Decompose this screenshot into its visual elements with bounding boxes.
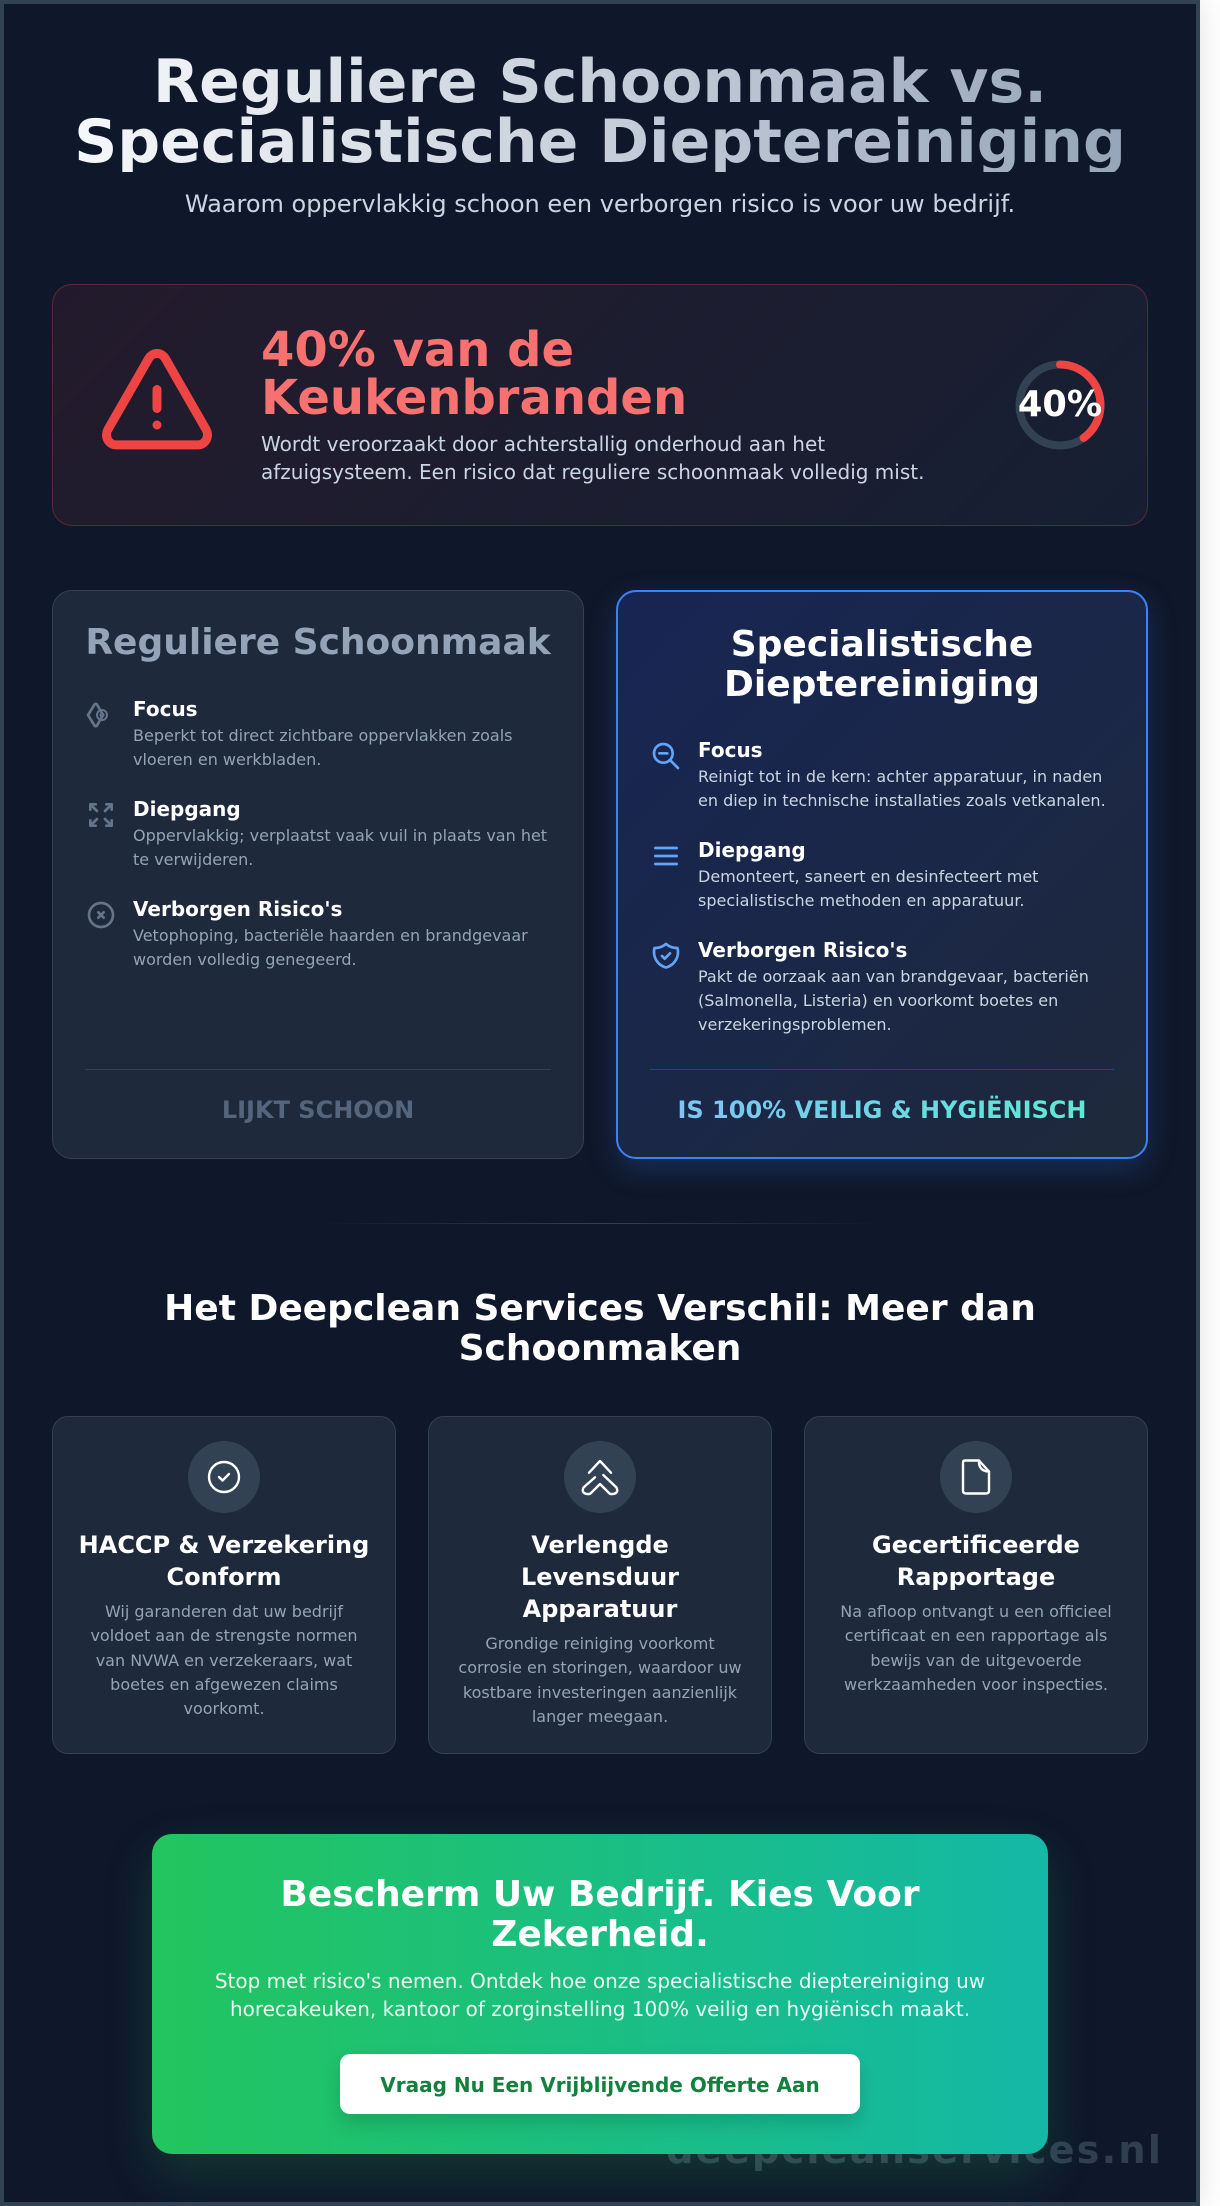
cta text [215, 1969, 985, 2021]
card text [458, 1634, 742, 1726]
alert text: Wordt veroorzaakt door achterstallig onderhoud aan het [261, 432, 825, 456]
panel: alert statistic [52, 284, 1148, 526]
card title: Conform [167, 1563, 281, 1591]
cta text: horecakeuken, kantoor of zorginstelling 100% veilig en hygiënisch maakt. [230, 1997, 970, 2021]
card text [840, 1602, 1112, 1694]
watermark: deepcleanservices.nl [666, 2128, 1163, 2173]
depth text [133, 797, 547, 869]
icon: layers lines [654, 846, 678, 866]
depth label: Diepgang [698, 838, 806, 862]
panel: HACCP [52, 1416, 396, 1754]
depth text [698, 838, 1038, 910]
alert text [261, 432, 924, 484]
card title: Levensduur [521, 1563, 679, 1591]
risks label: Verborgen Risico's [698, 938, 907, 962]
verdict: looks clean: LIJKT SCHOON [222, 1096, 414, 1124]
focus description: Reinigt tot in de kern: achter apparatuur, in naden [698, 766, 1102, 786]
heading: specialist cleaning: Dieptereiniging [724, 664, 1040, 705]
icon: warning triangle [102, 349, 212, 450]
focus text [133, 697, 512, 769]
focus label: Focus [133, 697, 198, 721]
depth description: Demonteert, saneert en desinfecteert met [698, 866, 1038, 886]
item: depth [89, 797, 547, 869]
section heading: difference: Het Deepclean Services Verschil: Meer dan [164, 1288, 1036, 1329]
cta button [340, 2054, 860, 2114]
risks description: verzekeringsproblemen. [698, 1015, 892, 1034]
card title: HACCP & Verzekering [79, 1530, 369, 1558]
risks description [698, 966, 1089, 1034]
item: focus [86, 697, 512, 769]
ring value: 40% [1018, 384, 1102, 425]
card text [90, 1602, 358, 1718]
card text: kostbare investeringen aanzienlijk [463, 1683, 737, 1702]
alert heading: 40% van de [261, 322, 574, 378]
cta heading: Bescherm Uw Bedrijf. Kies Voor [280, 1874, 920, 1915]
card title: Apparatuur [523, 1595, 677, 1623]
card text: voorkomt. [183, 1699, 265, 1718]
heading: specialist cleaning [724, 624, 1040, 705]
risks description: Pakt de oorzaak aan van brandgevaar, bacteriën [698, 966, 1089, 986]
depth description: specialistische methoden en apparatuur. [698, 891, 1025, 910]
alert heading [261, 322, 687, 426]
card text: langer meegaan. [532, 1707, 668, 1726]
verdict: safe and hygienic: IS 100% VEILIG & HYGIËNISCH [677, 1096, 1087, 1124]
depth description [133, 826, 547, 869]
card title [872, 1530, 1080, 1591]
section heading: difference [164, 1288, 1036, 1369]
icon: check circle [188, 1441, 260, 1513]
focus description: vloeren en werkbladen. [133, 750, 321, 769]
focus description [133, 726, 512, 769]
subtitle: Waarom oppervlakkig schoon een verborgen risico is voor uw bedrijf. [185, 190, 1015, 218]
item: focus [652, 738, 1106, 810]
cta button: Vraag Nu Een Vrijblijvende Offerte Aan [380, 2073, 820, 2097]
risks label: Verborgen Risico's [133, 897, 342, 921]
alert heading: Keukenbranden [261, 370, 687, 426]
risks description: (Salmonella, Listeria) en voorkomt boetes en [698, 991, 1058, 1010]
risks text [698, 938, 1089, 1034]
focus description: Beperkt tot direct zichtbare oppervlakken zoals [133, 726, 512, 744]
card title: Verlengde [531, 1530, 669, 1558]
cta text: Stop met risico's nemen. Ontdek hoe onze specialistische dieptereiniging uw [215, 1969, 985, 1993]
focus label: Focus [698, 738, 763, 762]
card text: bewijs van de uitgevoerde [870, 1651, 1082, 1670]
focus description: en diep in technische installaties zoals vetkanalen. [698, 791, 1106, 810]
title: Specialistische Dieptereiniging [74, 107, 1126, 177]
card text: certificaat en een rapportage als [845, 1626, 1107, 1645]
panel: reporting [804, 1416, 1148, 1754]
card text: voldoet aan de strengste normen [90, 1626, 358, 1645]
alert text: afzuigsysteem. Een risico dat reguliere schoonmaak volledig mist. [261, 460, 924, 484]
card title [521, 1530, 679, 1623]
panel: regular cleaning [52, 590, 584, 1159]
title: Reguliere Schoonmaak vs. [153, 47, 1047, 117]
panel: specialist deep cleaning [616, 590, 1148, 1159]
risks description: Vetophoping, bacteriële haarden en brandgevaar [133, 926, 528, 944]
depth description [698, 866, 1038, 910]
item: hidden risks [88, 897, 528, 969]
panel: lifespan [428, 1416, 772, 1754]
depth description: Oppervlakkig; verplaatst vaak vuil in plaats van het [133, 826, 547, 844]
icon: x circle [88, 902, 114, 928]
card text: Wij garanderen dat uw bedrijf [105, 1602, 343, 1621]
title [52, 52, 1148, 172]
cta heading: Zekerheid. [491, 1914, 709, 1955]
panel: call to action [152, 1834, 1048, 2154]
section heading: difference: Schoonmaken [459, 1328, 741, 1369]
risks description: worden volledig genegeerd. [133, 950, 357, 969]
depth description: te verwijderen. [133, 850, 253, 869]
heading: regular cleaning: Reguliere Schoonmaak [85, 622, 551, 663]
card text: werkzaamheden voor inspecties. [844, 1675, 1108, 1694]
depth label: Diepgang [133, 797, 241, 821]
risks description [133, 926, 528, 969]
risks text [133, 897, 528, 969]
icon: focus [86, 702, 108, 728]
icon: magnifier [652, 742, 680, 770]
item: hidden risks [652, 938, 1089, 1034]
card text: boetes en afgewezen claims [110, 1675, 338, 1694]
card title [79, 1530, 369, 1591]
card text: Grondige reiniging voorkomt [485, 1634, 715, 1653]
card text: Na afloop ontvangt u een officieel [840, 1602, 1112, 1621]
focus text [698, 738, 1106, 810]
icon: expand arrows [89, 802, 113, 828]
card title: Rapportage [897, 1563, 1055, 1591]
chart: 40 percent ring [1016, 360, 1104, 450]
card text: corrosie en storingen, waardoor uw [458, 1658, 742, 1677]
icon: chevrons up [564, 1441, 636, 1513]
focus description [698, 766, 1106, 810]
card text: van NVWA en verzekeraars, wat [96, 1651, 352, 1670]
cta heading [280, 1874, 920, 1955]
card title: Gecertificeerde [872, 1530, 1080, 1558]
icon: document [940, 1441, 1012, 1513]
heading: specialist cleaning: Specialistische [731, 624, 1033, 665]
item: depth [654, 838, 1038, 910]
icon: shield check [652, 942, 680, 969]
